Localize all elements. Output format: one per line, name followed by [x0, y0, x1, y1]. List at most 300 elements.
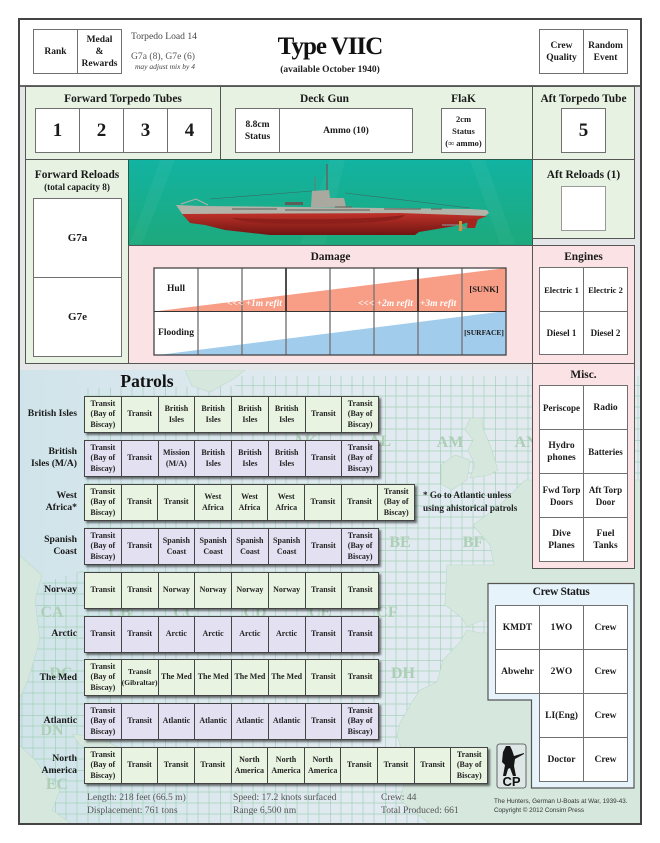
map background: EC [46, 776, 68, 793]
label: Arctic: Arctic [51, 628, 77, 639]
row: West Africa: Biscay) [384, 508, 409, 517]
row: West Africa: Transit [164, 497, 189, 506]
row: Arctic: Arctic [166, 629, 187, 638]
row: North America: Transit [457, 750, 482, 759]
row: Spanish Coast: Biscay) [348, 552, 373, 561]
row: North America: Transit [164, 760, 188, 769]
row: British Isles M/A: Transit [90, 443, 115, 452]
header divider [19, 85, 641, 86]
map background: AM [437, 434, 463, 451]
hydrophones: Hydro [548, 440, 575, 450]
row: West Africa: Africa [239, 502, 260, 512]
row: North America: North [239, 755, 260, 764]
map background: BF [463, 534, 483, 551]
hull label: Hull [167, 284, 185, 294]
torpedo load text: may adjust mix by 4 [135, 62, 195, 71]
row: Spanish Coast: Biscay) [90, 552, 115, 561]
map background: CB [109, 604, 131, 621]
map background: CE [309, 604, 331, 621]
ammo [279, 108, 413, 153]
row: British Isles M/A: British [201, 448, 225, 457]
panel: forward reloads [25, 159, 129, 364]
row: British Isles [84, 396, 379, 433]
crew: crew 1: Crew [594, 622, 616, 632]
row: British Isles: Isles [279, 414, 294, 424]
panel: crew status [487, 582, 635, 789]
row: Spanish Coast: Coast [203, 546, 223, 556]
header: medal and rewards box: Rewards [82, 58, 117, 68]
crew: crew 3: Crew [594, 710, 616, 720]
row: Spanish Coast: (Bay of [348, 541, 372, 550]
copyright [494, 798, 627, 814]
heading: Forward Torpedo Tubes [64, 93, 182, 105]
tube 4 [167, 108, 212, 153]
row: Atlantic: Transit [90, 706, 115, 715]
sunk: [SUNK] [469, 284, 499, 294]
G7a box: G7a [68, 232, 87, 244]
specs: speed and range: Speed: 17.2 knots surfaced [233, 792, 336, 803]
G7e box [33, 277, 122, 357]
electric 2: Electric 2 [588, 284, 623, 294]
map background: AL [369, 433, 391, 450]
row: North America: Transit [420, 760, 445, 769]
label: West Africa: Africa* [46, 502, 77, 513]
label: British Isles M/A [31, 446, 77, 469]
2cm status: (∞ ammo) [445, 138, 482, 148]
flooding label: Flooding [158, 328, 194, 338]
row: The Med: Transit [348, 672, 372, 681]
row: North America: Transit [384, 760, 408, 769]
header: crew quality box [539, 29, 584, 74]
label: British Isles M/A: Isles (M/A) [31, 458, 77, 469]
row: Spanish Coast: Spanish [236, 536, 263, 545]
row: Norway [84, 572, 379, 609]
refit 1: <<< +1m refit [227, 299, 282, 309]
row: West Africa: Africa [275, 502, 297, 512]
row: Spanish Coast: Coast [167, 546, 186, 556]
map background: CD [243, 604, 267, 621]
tube 5 [561, 108, 606, 153]
panel: damage [128, 245, 533, 364]
8.8cm status [235, 108, 280, 153]
row: West Africa: (Bay of [90, 497, 115, 506]
label: British Isles M/A: British [48, 446, 77, 457]
row: Spanish Coast [84, 528, 379, 565]
tube 1 [35, 108, 80, 153]
label: Atlantic: Atlantic [44, 715, 77, 726]
heading: Aft Reloads (1) [547, 169, 620, 181]
row: Atlantic: (Bay of [348, 716, 372, 725]
panel: misc [532, 363, 635, 569]
2cm status: Status [452, 126, 475, 136]
header: random event box: Random [588, 40, 623, 50]
label: North America [41, 753, 77, 776]
row: Spanish Coast: Transit [127, 541, 152, 550]
crew: crew 2: Crew [594, 666, 616, 676]
row: British Isles: British [165, 404, 188, 413]
row: Norway: Transit [127, 585, 152, 594]
row: West Africa: Transit [310, 497, 335, 506]
ammo: Ammo (10) [323, 126, 369, 136]
G7a box [33, 198, 122, 278]
8.8cm status: 8.8cm [245, 120, 270, 130]
row: North America: Transit [90, 750, 115, 759]
map background: DC [49, 665, 73, 682]
row: West Africa: West [204, 492, 221, 501]
forward torpedo doors: Fwd Torp [543, 484, 580, 494]
electric 1: Electric 1 [544, 284, 579, 294]
row: North America: North [276, 755, 296, 764]
periscope [539, 385, 584, 430]
crew: Doctor [539, 737, 584, 782]
row: North America: (Bay of [90, 760, 115, 769]
row: The Med: The Med [161, 672, 192, 681]
row: Norway: Norway [273, 585, 300, 594]
fuel tanks: Fuel [597, 528, 614, 538]
heading: Forward Reloads [35, 169, 119, 181]
row: North America: Biscay) [457, 771, 482, 780]
row: North America: Biscay) [90, 771, 115, 780]
row: The Med: Transit [311, 672, 336, 681]
periscope: Periscope [543, 402, 580, 412]
map background: DN [40, 722, 64, 739]
icon: CP logo: CP [502, 774, 521, 789]
row: The Med: Transit [90, 662, 115, 671]
row: North America: North [312, 755, 333, 764]
row: British Isles M/A: Transit [127, 453, 152, 462]
dive planes: Planes [548, 540, 575, 550]
2cm status: 2cm [456, 114, 471, 124]
label: Spanish Coast: Coast [53, 546, 77, 557]
row: British Isles: (Bay of [91, 409, 115, 418]
torpedo load text: Torpedo Load 14 [131, 31, 197, 42]
header: crew quality box: Quality [546, 52, 577, 62]
panel: aft torpedo tube [532, 86, 635, 160]
aft torpedo door [583, 473, 628, 518]
tube 3 [123, 108, 168, 153]
row: British Isles: Isles [206, 414, 221, 424]
row: British Isles M/A: (Bay of [91, 453, 115, 462]
forward torpedo doors: Doors [550, 496, 573, 506]
crew: 2WO: 2WO [551, 666, 572, 676]
grey backing strip [19, 86, 641, 371]
row: North America: America [235, 766, 264, 774]
row: Spanish Coast: Transit [348, 531, 372, 540]
torpedo load text [131, 31, 197, 71]
heading: Damage [311, 251, 350, 263]
row: British Isles: British [275, 404, 298, 413]
electric 2 [583, 267, 628, 312]
row: Atlantic: Transit [127, 716, 152, 725]
row: North America: America [308, 766, 337, 774]
row: British Isles M/A: (Bay of [348, 453, 372, 462]
hydrophones: phones [547, 452, 576, 462]
row: British Isles M/A: Biscay) [348, 464, 373, 473]
row: Atlantic: Atlantic [199, 716, 227, 725]
crew: LI(Eng): LI(Eng) [545, 710, 578, 720]
row: British Isles M/A: (M/A) [166, 458, 187, 468]
row: Atlantic: Transit [348, 706, 372, 715]
map background: DH [391, 665, 416, 682]
map background [20, 370, 640, 823]
row: British Isles: Biscay) [348, 420, 373, 429]
row: Norway: Norway [200, 585, 227, 594]
row: Spanish Coast: Coast [240, 546, 260, 556]
row: The Med: The Med [198, 672, 229, 681]
row: Spanish Coast: Spanish [200, 536, 227, 545]
dive planes: Dive [552, 528, 571, 538]
row: Norway: Transit [90, 585, 115, 594]
row: West Africa: Biscay) [90, 508, 115, 517]
map background: CF [376, 604, 398, 621]
crew: 1WO: 1WO [551, 622, 572, 632]
row: Spanish Coast: Coast [277, 546, 296, 556]
row: Spanish Coast: Spanish [273, 536, 300, 545]
row: Arctic [84, 616, 379, 653]
row: Arctic: Transit [90, 629, 115, 638]
row: Arctic: Arctic [276, 629, 297, 638]
row: Spanish Coast: Transit [90, 531, 115, 540]
row: British Isles M/A: British [275, 448, 298, 457]
dive planes [539, 517, 584, 562]
row: British Isles: Biscay) [90, 420, 115, 429]
deck gun heading: Deck Gun [300, 93, 349, 105]
subtitle: (available October 1940) [280, 65, 380, 75]
row: British Isles: Transit [90, 399, 115, 408]
G7e box: G7e [68, 311, 87, 323]
refit 3: +3m refit [420, 299, 456, 309]
icon: CP logo [496, 744, 526, 789]
radio [583, 385, 628, 430]
capacity note: (total capacity 8) [44, 182, 110, 192]
specs: length and displacement: Displacement: 761 tons [87, 805, 178, 816]
header: medal and rewards box: & [96, 46, 103, 56]
row: British Isles: Transit [127, 409, 152, 418]
header: rank box [33, 29, 78, 74]
row: The Med: (Bay of [91, 672, 115, 681]
crew: Doctor: Doctor [548, 754, 575, 764]
row: Norway: Norway [163, 585, 190, 594]
label: British Isles: British Isles [28, 408, 77, 419]
row: Norway: Transit [348, 585, 372, 594]
row: North America: Transit [200, 760, 225, 769]
note: go to Atlantic: * Go to Atlantic unless [423, 490, 511, 500]
heading: Engines [564, 251, 603, 263]
row: North America [84, 747, 488, 784]
row: British Isles: Isles [169, 414, 184, 424]
crew: crew 4 [583, 737, 628, 782]
row: The Med: Transit [128, 667, 151, 676]
refit 2: <<< +2m refit [358, 299, 413, 309]
header: rank box: Rank [44, 46, 67, 56]
row: British Isles: British [201, 404, 225, 413]
row: Atlantic: Transit [311, 716, 336, 725]
row: The Med: The Med [271, 672, 302, 681]
header: random event box: Event [594, 52, 617, 62]
row: West Africa: Transit [347, 497, 372, 506]
row: British Isles M/A: Isles [206, 458, 221, 468]
row: Atlantic: (Bay of [91, 716, 115, 725]
flak heading: FlaK [451, 93, 476, 105]
map background: CA [40, 604, 64, 621]
specs: speed and range: Range 6,500 nm [233, 805, 296, 816]
row: North America: (Bay of [457, 760, 482, 769]
damage track [153, 267, 507, 356]
tube 5: 5 [579, 120, 588, 140]
torpedo load text: G7a (8), G7e (6) [131, 51, 195, 62]
title: Type VIIC [278, 33, 382, 60]
tube 2 [79, 108, 124, 153]
row: Atlantic: Atlantic [236, 716, 264, 725]
row: The Med [84, 659, 379, 696]
heading: Aft Torpedo Tube [540, 93, 627, 105]
specs: speed and range [233, 792, 336, 816]
row: West Africa: West [241, 492, 258, 501]
tube 4: 4 [185, 120, 194, 140]
map background: CC [173, 604, 197, 621]
crew: 2WO [539, 649, 584, 694]
row: British Isles M/A: Mission [163, 448, 190, 457]
header: medal and rewards box: Medal [87, 34, 112, 44]
heading: Misc. [570, 369, 597, 381]
row: British Isles: Isles [242, 414, 257, 424]
crew: crew 2 [583, 649, 628, 694]
header: medal and rewards box [77, 29, 122, 74]
diesel 2: Diesel 2 [591, 328, 620, 338]
row: Atlantic: Biscay) [348, 727, 373, 736]
row: British Isles M/A: British [238, 448, 262, 457]
row: Atlantic: Atlantic [273, 716, 300, 725]
row: North America: America [271, 766, 301, 774]
specs: crew and produced: Crew: 44 [381, 792, 416, 803]
specs: crew and produced: Total Produced: 661 [381, 805, 459, 816]
tube 3: 3 [141, 120, 150, 140]
panel: engines [532, 245, 635, 364]
specs: length and displacement [87, 792, 186, 816]
electric 1 [539, 267, 584, 312]
row: North America: Transit [347, 760, 372, 769]
row: British Isles M/A: Biscay) [90, 464, 115, 473]
row: British Isles M/A: Isles [279, 458, 294, 468]
label: Spanish Coast [44, 534, 77, 557]
surface: [SURFACE] [464, 328, 504, 337]
radio: Radio [593, 402, 618, 412]
row: Atlantic [84, 703, 379, 740]
diesel 1 [539, 311, 584, 355]
crew: KMDT [495, 605, 540, 650]
panel: aft reloads [532, 159, 635, 239]
row: The Med: Biscay) [90, 683, 115, 692]
row: West Africa: (Bay of [384, 497, 409, 506]
row: The Med: The Med [234, 672, 265, 681]
diesel 1: Diesel 1 [547, 328, 576, 338]
specs: length and displacement: Length: 218 feet (66.5 m) [87, 792, 186, 803]
panel: forward torpedo tubes [25, 86, 221, 160]
row: The Med: (Gibraltar) [122, 678, 158, 686]
note: go to Atlantic [423, 490, 518, 513]
hydrophones [539, 429, 584, 474]
label: West Africa [46, 490, 77, 513]
fuel tanks: Tanks [593, 540, 618, 550]
row: British Isles: Transit [348, 399, 372, 408]
aft torpedo door: Aft Torp [589, 484, 622, 494]
label: Spanish Coast: Spanish [44, 534, 77, 545]
row: West Africa: Transit [127, 497, 152, 506]
row: North America: Transit [127, 760, 152, 769]
crew status heading: Crew Status [533, 586, 589, 598]
row: Arctic: Arctic [203, 629, 224, 638]
row: West Africa: Transit [90, 487, 115, 496]
map background: BE [389, 534, 411, 551]
diesel 2 [583, 311, 628, 355]
row: Spanish Coast: Transit [311, 541, 336, 550]
row: Spanish Coast: Spanish [163, 536, 190, 545]
flooding wedge [158, 311, 506, 355]
row: Arctic: Transit [311, 629, 336, 638]
row: British Isles M/A: Transit [348, 443, 372, 452]
specs: crew and produced [381, 792, 459, 816]
label: North America: North [52, 753, 77, 764]
panel: deck gun and flak [220, 86, 533, 160]
patrols heading: Patrols [120, 371, 174, 391]
aft torpedo door: Door [596, 496, 615, 506]
crew: crew 3 [583, 693, 628, 738]
tube 2: 2 [97, 120, 106, 140]
8.8cm status: Status [245, 132, 270, 142]
header: crew quality box: Crew [550, 40, 572, 50]
reload box [561, 186, 606, 231]
copyright: The Hunters, German U-Boats at War, 1939-43. [494, 798, 627, 805]
hull wedge [158, 268, 506, 311]
row: British Isles: (Bay of [348, 409, 372, 418]
batteries [583, 429, 628, 474]
tube 1: 1 [53, 120, 62, 140]
label: Norway: Norway [44, 584, 77, 595]
row: British Isles: Transit [311, 409, 336, 418]
row: Arctic: Transit [127, 629, 152, 638]
copyright: Copyright © 2012 Consim Press [494, 807, 584, 814]
forward torpedo doors [539, 473, 584, 518]
label: West Africa: West [57, 490, 77, 501]
label: The Med: The Med [40, 672, 77, 683]
crew: 1WO [539, 605, 584, 650]
map background: AN [514, 434, 538, 451]
row: British Isles M/A [84, 440, 379, 477]
2cm status [441, 108, 486, 153]
crew: LI(Eng) [539, 693, 584, 738]
row: British Isles M/A: Isles [242, 458, 257, 468]
row: Norway: Norway [236, 585, 263, 594]
row: Arctic: Transit [348, 629, 372, 638]
row: West Africa: Transit [384, 487, 409, 496]
submarine illustration [128, 159, 533, 245]
row: Arctic: Arctic [239, 629, 260, 638]
crew: crew 1 [583, 605, 628, 650]
fuel tanks [583, 517, 628, 562]
crew: KMDT: KMDT [503, 622, 532, 632]
row: Norway: Transit [311, 585, 336, 594]
row: British Isles: British [238, 404, 262, 413]
header: random event box [583, 29, 628, 74]
row: West Africa [84, 484, 415, 521]
label: North America: America [41, 765, 77, 776]
row: British Isles M/A: Transit [311, 453, 336, 462]
row: West Africa: West [278, 492, 295, 501]
crew: Abwehr: Abwehr [501, 666, 534, 676]
note: go to Atlantic: using ahistorical patrols [423, 502, 517, 512]
row: West Africa: Africa [202, 502, 224, 512]
row: Spanish Coast: (Bay of [91, 541, 115, 550]
